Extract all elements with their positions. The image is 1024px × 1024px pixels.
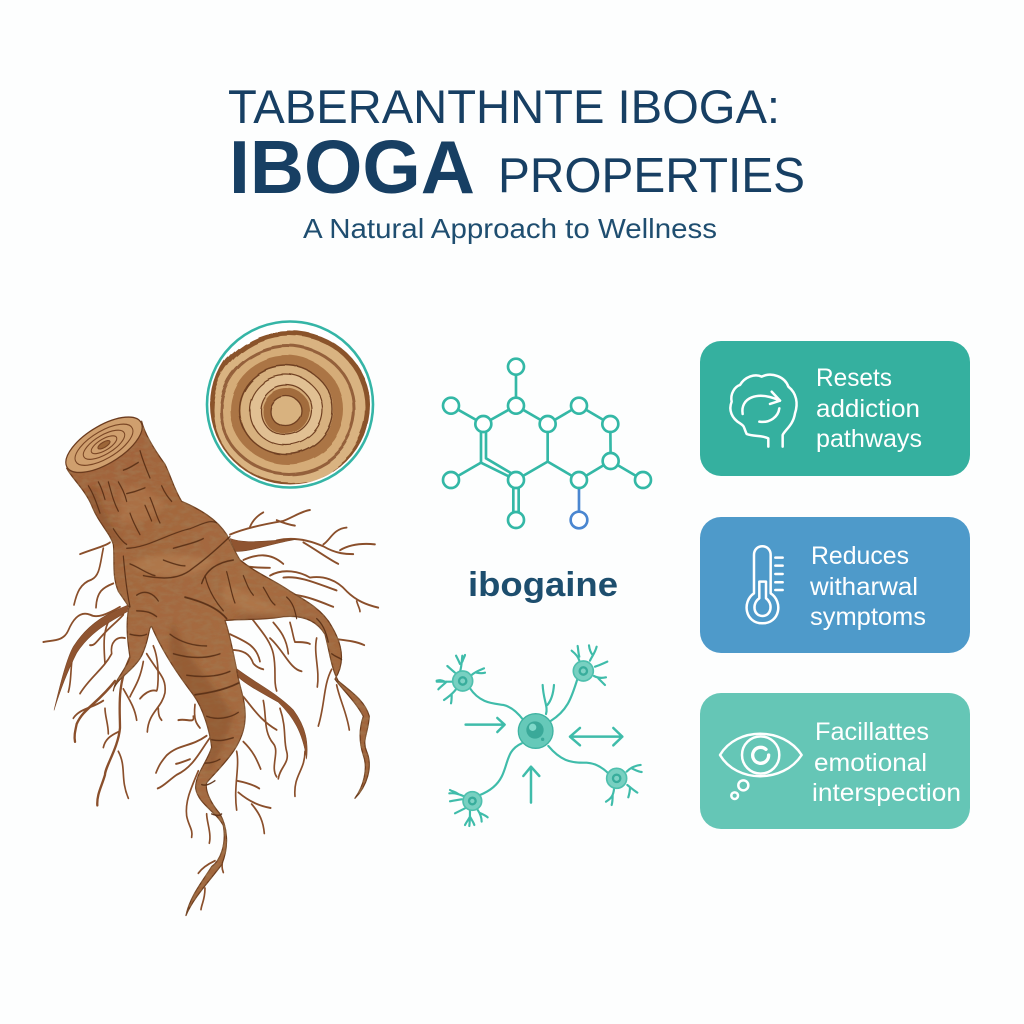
root bark marks — [88, 451, 342, 815]
benefit card: resets addiction pathways — [700, 341, 970, 476]
stump cut face — [59, 406, 149, 484]
root body — [67, 421, 369, 915]
benefit card: facilitates emotional introspection — [700, 693, 970, 829]
subtitle: A Natural Approach to Wellness — [303, 213, 717, 244]
card text: Reduces — [811, 542, 909, 570]
card text — [812, 718, 961, 807]
icon: brain with reset arrow — [730, 375, 797, 447]
molecule bonds — [451, 367, 643, 520]
icon: eye with thought bubbles — [720, 734, 802, 799]
card text: Facillattes — [815, 718, 929, 746]
molecule diagram — [443, 359, 651, 528]
label: ibogaine: ibogaine — [468, 566, 618, 604]
fine root fibers — [43, 510, 378, 910]
illustration: root cross-section — [207, 322, 373, 488]
blue atom — [571, 512, 587, 528]
title block — [228, 80, 805, 244]
central neuron — [518, 714, 553, 748]
neuron nuclei — [459, 667, 620, 804]
title bold word: IBOGA — [229, 125, 475, 209]
tapered side roots — [54, 539, 307, 759]
card text: symptoms — [810, 603, 926, 631]
card text: witharwal — [809, 573, 918, 601]
card text: emotional — [814, 749, 927, 777]
molecule atoms — [443, 359, 651, 528]
card text — [809, 542, 926, 631]
title line 1: TABERANTHNTE IBOGA: — [228, 80, 780, 133]
wood rings — [208, 331, 372, 487]
neuron cell bodies — [453, 661, 627, 810]
card text — [816, 364, 922, 453]
arrows — [466, 718, 622, 803]
card text: pathways — [816, 425, 922, 453]
axons and dendrites — [437, 645, 642, 826]
molecule link to blue atom — [575, 480, 583, 520]
card text: addiction — [816, 395, 920, 423]
card text: Resets — [816, 364, 892, 392]
benefit card: reduces withdrawal symptoms — [700, 517, 970, 653]
card text: interspection — [812, 779, 961, 807]
icon: thermometer — [747, 546, 783, 623]
neuron network diagram — [437, 645, 642, 826]
illustration: iboga root — [43, 406, 378, 915]
root shading — [87, 488, 286, 767]
title word properties: PROPERTIES — [498, 149, 805, 203]
teal ring — [207, 322, 373, 488]
